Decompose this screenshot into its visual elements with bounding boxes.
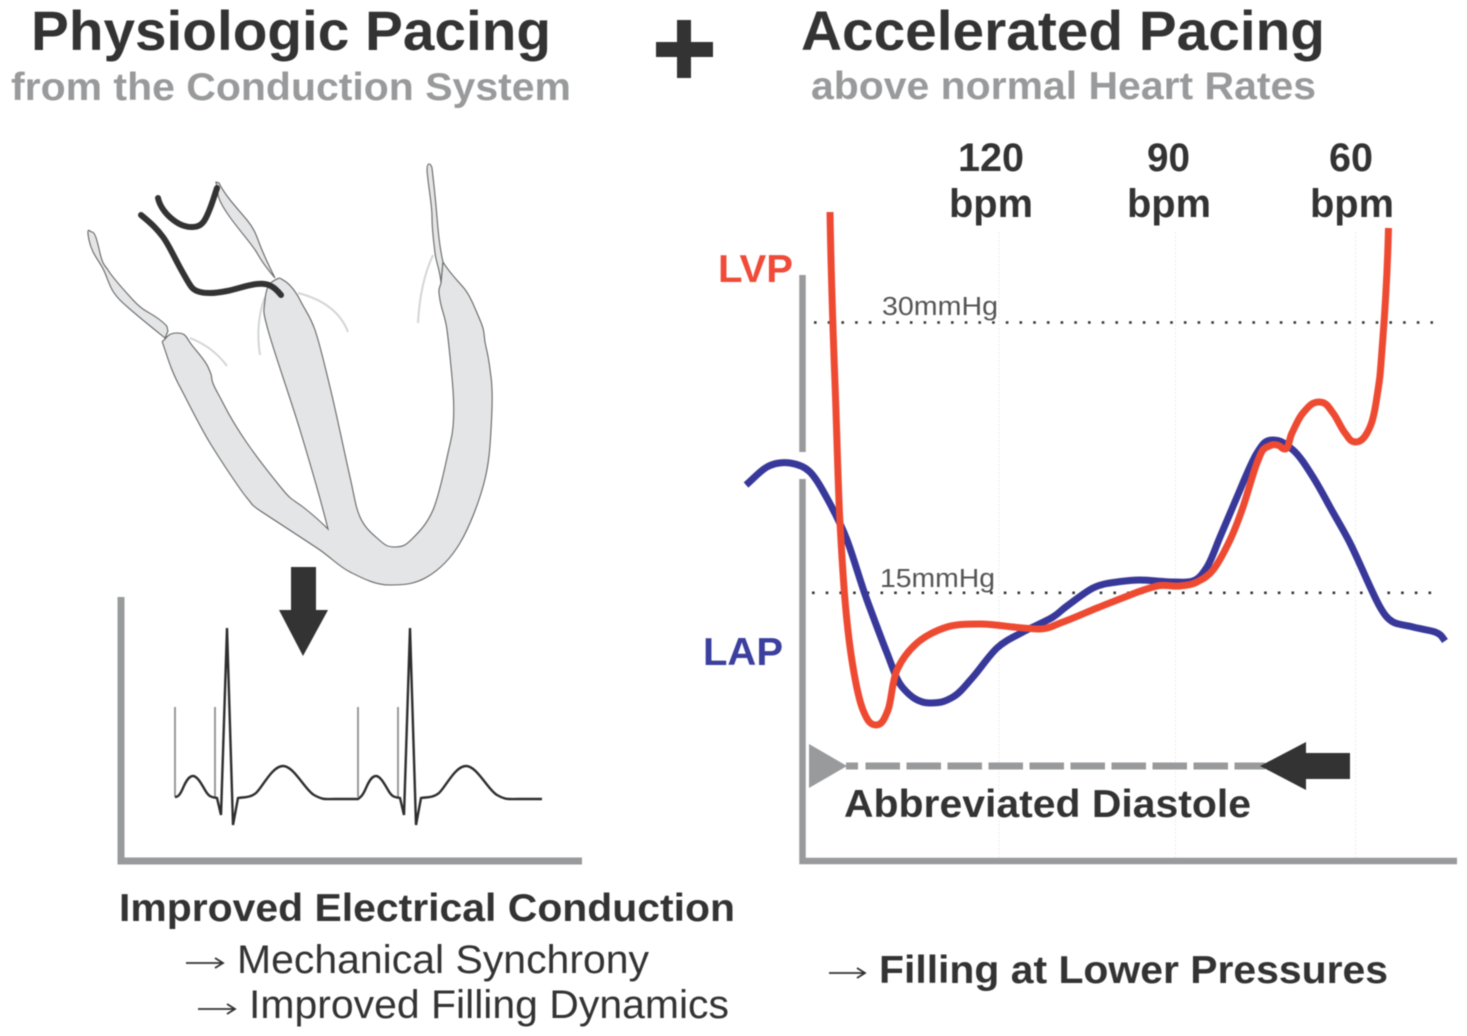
curve: LAP: [746, 440, 1445, 703]
ECG axes: [121, 597, 582, 861]
curve: LVP: [830, 212, 1388, 725]
label: abbreviated diastole: Abbreviated Diastole: [844, 783, 1251, 826]
heart rate labels: bpm: [1310, 182, 1394, 226]
dotted line: 30mmHg: [814, 321, 1433, 324]
ECG trace: [175, 628, 542, 825]
title: physiologic pacing: from the Conduction System: [11, 66, 571, 109]
text: left conclusions: [119, 887, 735, 1027]
title: physiologic pacing: [11, 0, 571, 109]
heart rate labels: 90: [1147, 136, 1190, 180]
heart rate labels: [949, 136, 1394, 226]
heart rate labels: 60: [1329, 136, 1373, 180]
label: LVP: LVP: [718, 248, 793, 291]
title: accelerated pacing: Accelerated Pacing: [801, 0, 1325, 62]
text: left conclusions: Improved Filling Dynamics: [249, 983, 729, 1027]
text: filling at lower pressures: Filling at Lower Pressures: [879, 949, 1388, 992]
arrow: improved filling: [198, 1004, 235, 1014]
ECG pacing spikes: [175, 707, 398, 797]
pacing leads: [141, 188, 281, 295]
arrow: down from heart to ECG: [279, 567, 328, 656]
title: accelerated pacing: [801, 0, 1325, 108]
label: 30mmHg: 30mmHg: [882, 293, 998, 321]
arrow: abbreviated diastole: [809, 742, 1350, 790]
faint heart rate guide lines: [999, 232, 1356, 860]
dotted line: 15mmHg: [812, 591, 1432, 594]
heart rate labels: bpm: [949, 182, 1033, 226]
title: accelerated pacing: above normal Heart Rates: [811, 65, 1316, 108]
ECG chart panel: [121, 597, 582, 861]
pressure chart panel: [703, 136, 1457, 861]
heart rate labels: 120: [958, 136, 1024, 180]
text: left conclusions: Mechanical Synchrony: [237, 938, 649, 982]
title: physiologic pacing: Physiologic Pacing: [31, 0, 551, 62]
text: left conclusions: Improved Electrical Conduction: [119, 887, 735, 930]
heart rate labels: bpm: [1127, 182, 1211, 226]
label: LAP: LAP: [703, 631, 783, 674]
arrow: mechanical synchrony: [186, 958, 223, 968]
pressure axes: [802, 275, 1457, 861]
arrow: filling: [829, 968, 865, 978]
heart diagram with pacing leads: [88, 164, 492, 585]
icon: plus sign: [656, 20, 713, 78]
label: 15mmHg: 15mmHg: [880, 565, 995, 593]
